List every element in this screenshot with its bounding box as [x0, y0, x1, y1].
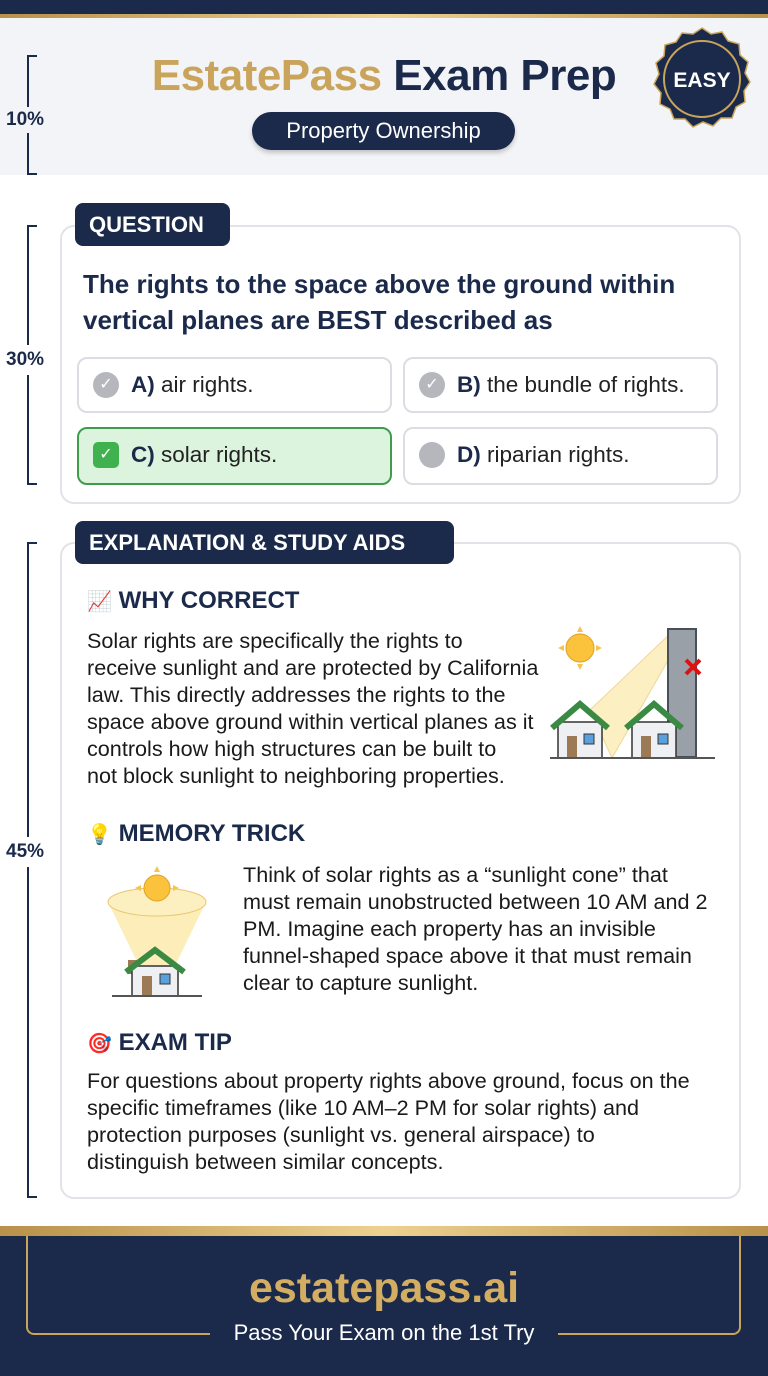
exam tip text: For questions about property rights above ground, focus on the [87, 1068, 690, 1093]
why correct text: receive sunlight and are protected by California [87, 655, 538, 680]
memory trick text: must remain unobstructed between 10 AM and 2 [243, 889, 708, 914]
question text [83, 269, 675, 335]
why correct text: space above ground within vertical planes as it [87, 709, 534, 734]
footer [0, 1226, 768, 1376]
why correct text: not block sunlight to neighboring properties. [87, 763, 505, 788]
exam tip text: specific timeframes (like 10 AM–2 PM for solar rights) and [87, 1095, 639, 1120]
memory trick text: clear to capture sunlight. [243, 970, 478, 995]
subtitle pill [252, 112, 515, 150]
why correct heading: 📈 WHY CORRECT [87, 587, 299, 614]
memory trick text: Think of solar rights as a “sunlight cone” that [243, 862, 668, 887]
question text: vertical planes are BEST described as [83, 305, 553, 335]
exam tip text [87, 1068, 690, 1174]
question tag: QUESTION [89, 212, 204, 237]
exam tip text: distinguish between similar concepts. [87, 1149, 443, 1174]
explanation tag: EXPLANATION & STUDY AIDS [89, 530, 405, 555]
badge: easy [653, 27, 751, 128]
panel: explanation [60, 542, 741, 1199]
icon: sunlight cone house [108, 866, 206, 997]
option B [403, 357, 718, 413]
text: 45% [6, 841, 44, 862]
option D [403, 427, 718, 485]
option D: D) riparian rights. [457, 442, 630, 467]
question tag [75, 203, 230, 246]
memory trick text: funnel-shaped space above it that must remain [243, 943, 692, 968]
top bar [0, 0, 768, 14]
exam tip text: protection purposes (sunlight vs. general airspace) to [87, 1122, 595, 1147]
text: 10% [6, 109, 44, 130]
panel: question [60, 225, 741, 504]
bracket 30% [27, 225, 37, 485]
subtitle pill: Property Ownership [286, 118, 481, 143]
option C correct: ✓ [99, 446, 113, 463]
why correct text [87, 628, 538, 788]
header [0, 18, 768, 175]
icon: sun blocked by tower [550, 626, 715, 759]
option A [77, 357, 392, 413]
text: 30% [6, 349, 44, 370]
badge: easy: EASY [673, 69, 731, 92]
option C correct [77, 427, 392, 485]
why correct text: controls how high structures can be built to [87, 736, 496, 761]
why correct text: law. This directly addresses the rights to the [87, 682, 505, 707]
footer brand: estatepass.ai [249, 1264, 519, 1312]
option B: B) the bundle of rights. [457, 372, 685, 397]
bracket 10% [27, 55, 37, 175]
footer tagline: Pass Your Exam on the 1st Try [234, 1320, 534, 1345]
memory trick text: PM. Imagine each property has an invisible [243, 916, 656, 941]
option A: A) air rights. [131, 372, 254, 397]
explanation tag [75, 521, 454, 564]
memory trick heading: 💡 MEMORY TRICK [87, 820, 305, 847]
title: EstatePass Exam Prep [152, 51, 616, 100]
option B: ✓ [425, 376, 439, 393]
question text: The rights to the space above the ground within [83, 269, 675, 299]
bracket 45% [27, 542, 37, 1198]
option A: ✓ [99, 376, 113, 393]
memory trick text [243, 862, 708, 995]
option C correct: C) solar rights. [131, 442, 277, 467]
why correct text: Solar rights are specifically the rights to [87, 628, 463, 653]
exam tip heading: 🎯 EXAM TIP [87, 1029, 232, 1056]
